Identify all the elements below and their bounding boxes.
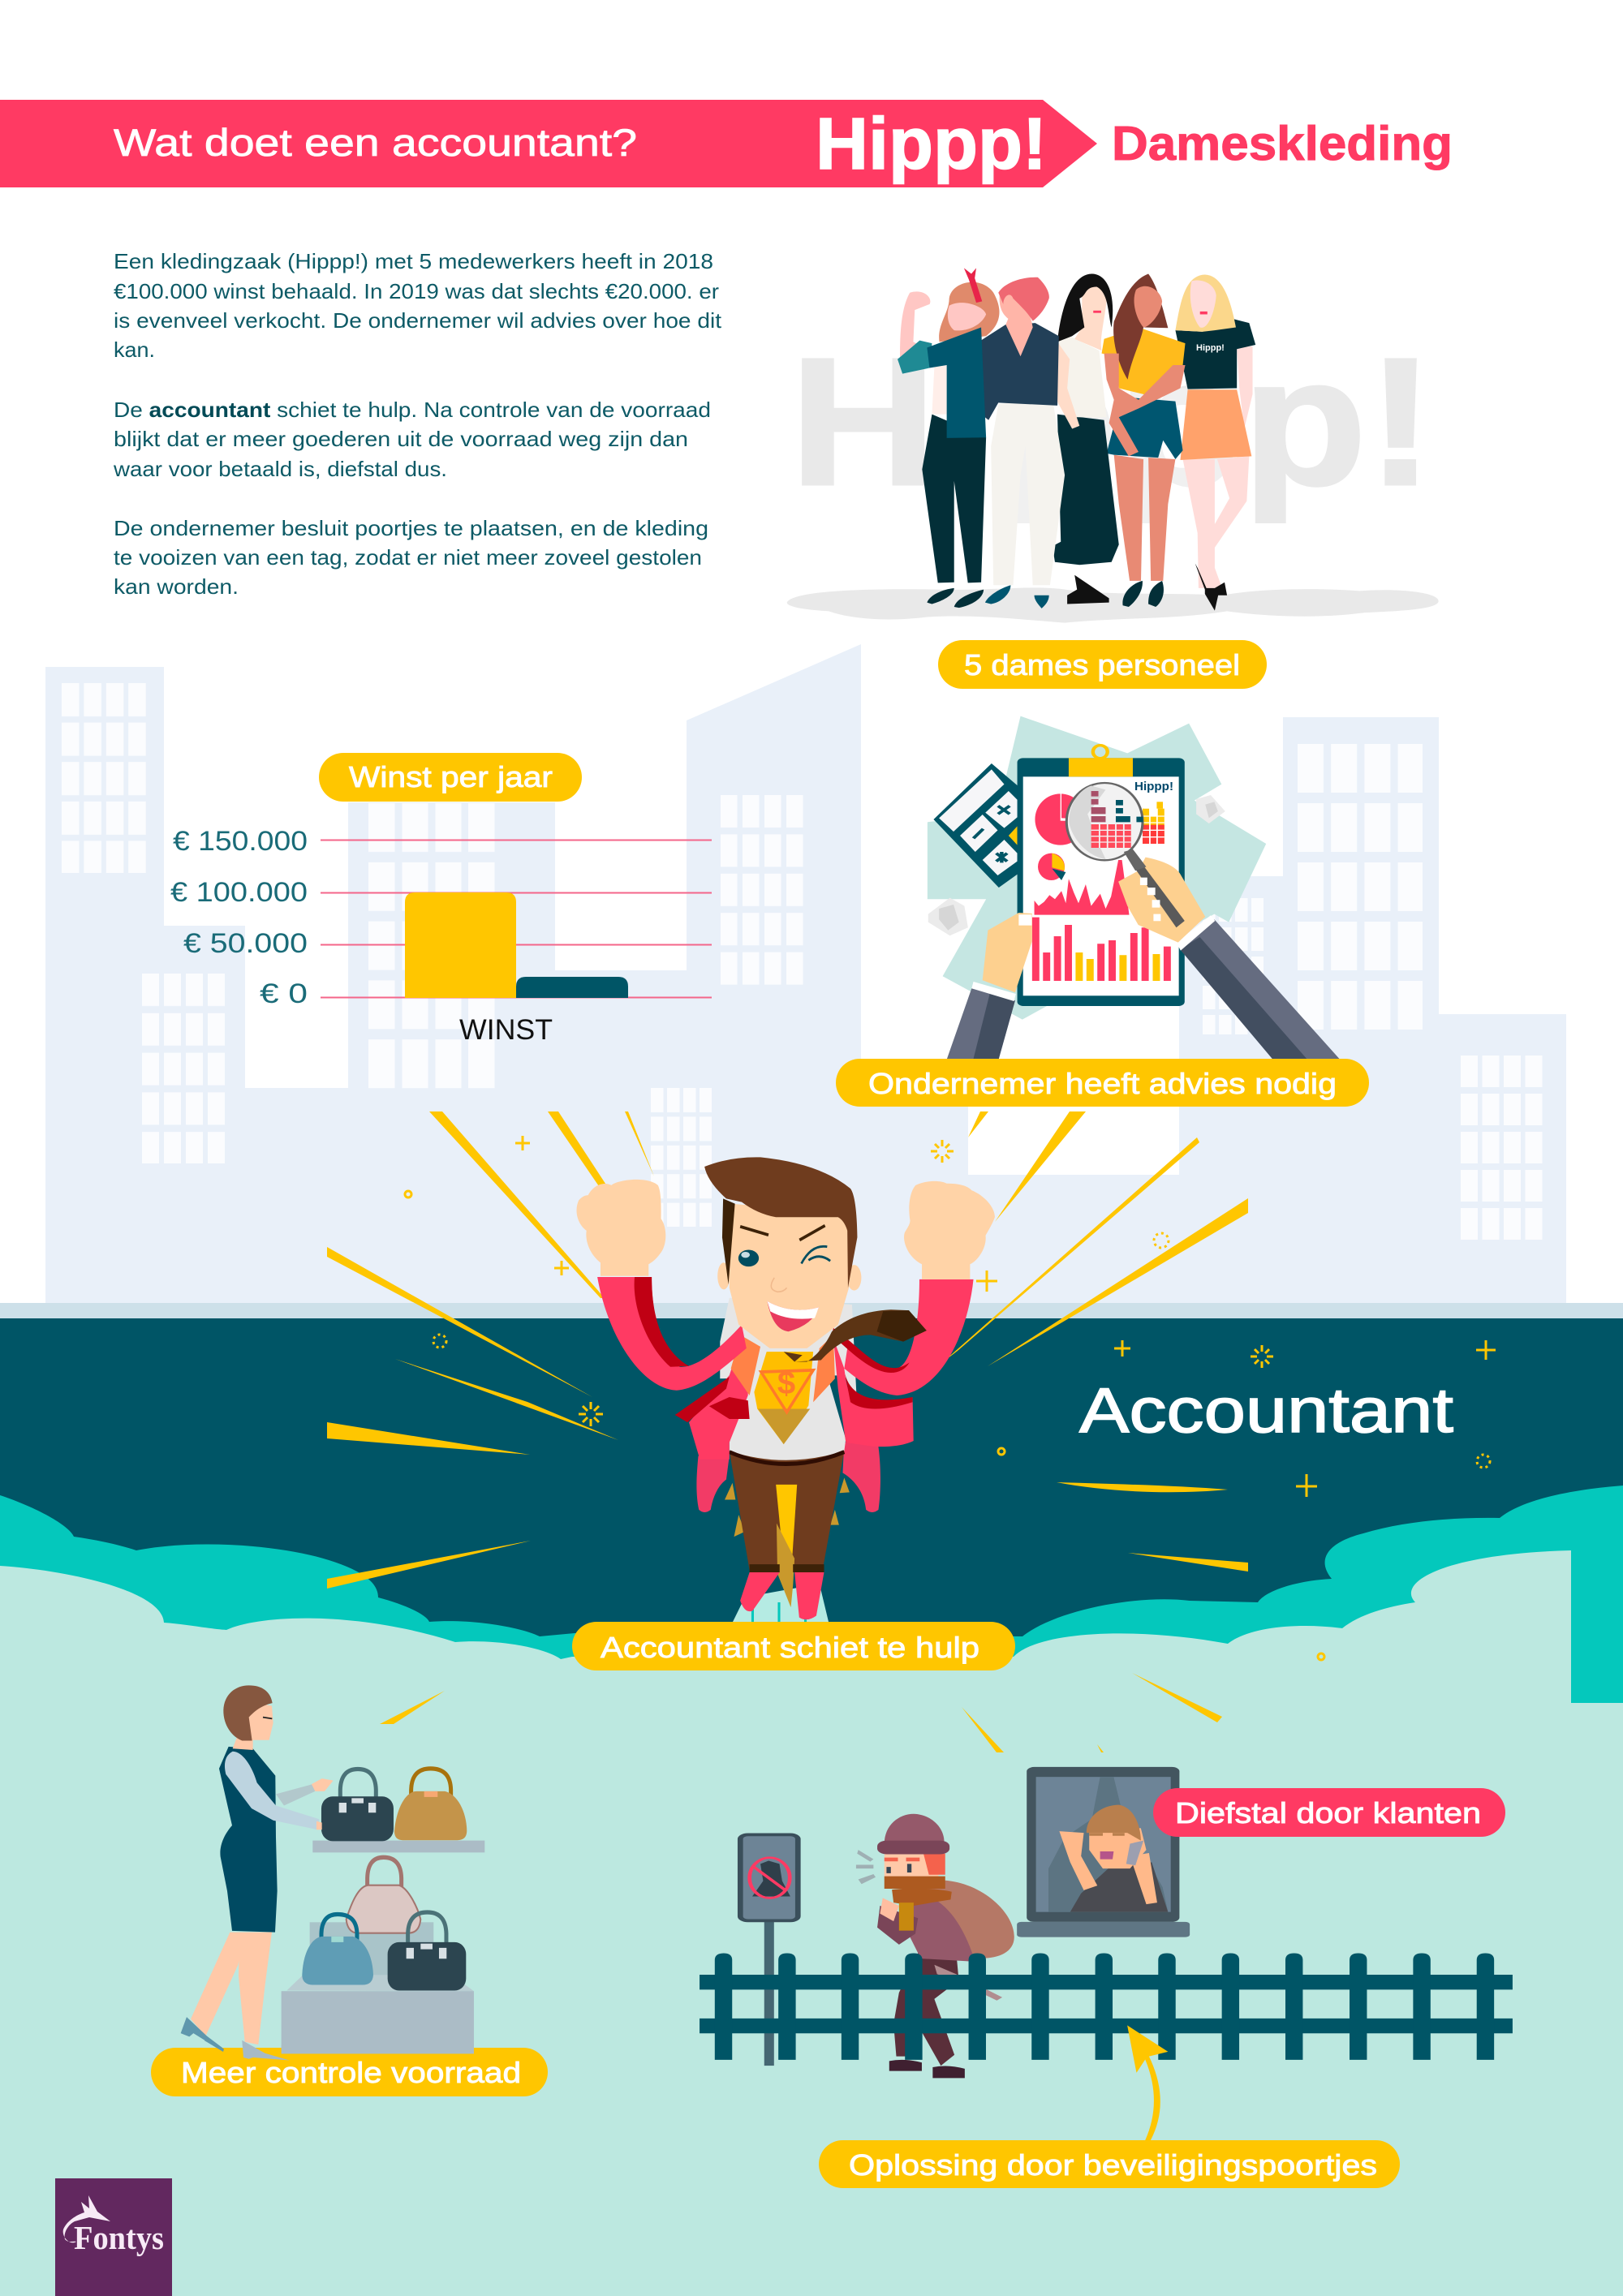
display stands [282, 1841, 484, 2053]
saleswoman [181, 1685, 334, 2061]
right arm [832, 1279, 974, 1395]
logo: fontys [55, 2178, 172, 2296]
intro text [113, 249, 722, 599]
shirt emblem: $ [777, 1365, 795, 1401]
woman 4 [1102, 273, 1186, 607]
pill: ondernemer: Ondernemer heeft advies nodig [868, 1067, 1337, 1100]
chart heading [319, 753, 582, 802]
bag: top left [321, 1769, 394, 1841]
pixel bar chart [1136, 801, 1165, 845]
bag: top right [394, 1769, 467, 1840]
intro text: De ondernemer besluit poortjes te plaatsen, en de kleding [114, 516, 708, 540]
thief [856, 1814, 1014, 2078]
shirt logo: Hippp! [1196, 343, 1225, 353]
head [704, 1157, 861, 1348]
intro text: kan worden. [114, 574, 239, 599]
pill: 5 dames personeel: 5 dames personeel [964, 648, 1240, 681]
pill: diefstal door klanten: Diefstal door klanten [1175, 1796, 1481, 1829]
trousers [730, 1451, 844, 1571]
teal cloud [0, 1486, 1623, 1866]
accountant heading: Accountant [1079, 1374, 1453, 1446]
bar 2018 [405, 892, 516, 998]
ground strip [0, 1303, 1623, 1319]
subtitle: Dameskleding [1112, 117, 1453, 170]
bar chart: winst per jaar [170, 753, 712, 1046]
shirt [730, 1348, 846, 1464]
window [1017, 1767, 1190, 1937]
redraw feet over pill [204, 2039, 474, 2061]
fence [700, 1954, 1513, 2060]
pill: oplossing: Oplossing door beveiligingspoortjes [849, 2148, 1377, 2182]
pill: meer controle voorraad: Meer controle voorraad [181, 2056, 521, 2089]
pill: oplossing [819, 2140, 1400, 2188]
axis labels: € 50.000 [183, 928, 308, 959]
pill: diefstal door klanten [1153, 1788, 1505, 1837]
no-thief sign [740, 1834, 798, 2066]
axis labels: € 150.000 [173, 826, 308, 857]
title: Wat doet een accountant? [114, 121, 637, 164]
intro text: €100.000 winst behaald. In 2019 was dat slechts €20.000. er [114, 279, 719, 303]
illustration: thief and witness [700, 1767, 1513, 2140]
woman 2 [979, 277, 1065, 608]
area chart [1035, 860, 1129, 915]
light cloud panel [0, 1550, 1623, 2296]
hands [983, 849, 1205, 992]
pill: meer controle voorraad [151, 2048, 548, 2096]
illustration: woman checking handbags [181, 1685, 484, 2061]
pill: accountant schiet te hulp: Accountant schiet te hulp [601, 1631, 979, 1664]
pill: ondernemer [836, 1059, 1369, 1107]
intro text: kan. [114, 338, 155, 362]
axis labels: € 0 [260, 978, 308, 1009]
right arm [1177, 915, 1339, 1059]
brand logo text: Hippp! [816, 104, 1047, 185]
intro text: is evenveel verkocht. De ondernemer wil advies over hoe dit [114, 308, 722, 333]
dark teal panel [0, 1318, 1623, 1805]
bag: dark lower [388, 1912, 466, 1991]
magnifying glass [1066, 783, 1143, 860]
pill: 5 dames personeel [938, 640, 1267, 689]
woman 3 [1050, 273, 1119, 604]
bag: blue [302, 1914, 373, 1985]
intro text: Een kledingzaak (Hippp!) met 5 medewerkers heeft in 2018 [114, 249, 713, 273]
left arm [597, 1277, 747, 1391]
left arm [947, 982, 1016, 1059]
clipboard brand: Hippp! [1134, 780, 1173, 793]
axis labels [170, 826, 308, 1009]
speed lines [327, 1111, 1248, 1752]
x label: WINST [459, 1014, 553, 1046]
bar 2019 [516, 977, 628, 998]
illustration: superhero accountant [577, 1157, 995, 1623]
coat tails [696, 1443, 880, 1512]
tie [784, 1309, 927, 1362]
intro text: waar voor betaald is, diefstal dus. [113, 457, 447, 481]
logo: fontys: Fontys [74, 2219, 164, 2256]
woman 5 [1175, 275, 1255, 611]
flames [725, 1478, 850, 1537]
rocket trail [733, 1584, 829, 1623]
calculator [933, 763, 1022, 888]
arrow [1127, 2025, 1168, 2140]
bag: pink [347, 1857, 420, 1933]
intro text: De accountant schiet te hulp. Na controle van de voorraad [114, 398, 711, 422]
woman 1 [898, 268, 999, 608]
ghost brand text: Hippp! [790, 320, 1435, 523]
sparkles [405, 1136, 1496, 1660]
pie charts [1035, 793, 1086, 880]
cuffs and boots [740, 1564, 824, 1619]
title banner [0, 100, 1097, 187]
illustration: clipboard with charts [928, 716, 1339, 1059]
bar chart [1032, 918, 1171, 981]
intro text: te vooizen van een tag, zodat er niet meer zoveel gestolen [114, 545, 702, 570]
intro text: blijkt dat er meer goederen uit de voorraad weg zijn dan [114, 427, 688, 451]
clipboard [1018, 746, 1185, 1006]
pill: accountant schiet te hulp [572, 1622, 1015, 1670]
city skyline background [45, 644, 1566, 1304]
illustration: five women [787, 268, 1439, 623]
fists [577, 1180, 995, 1279]
coat [675, 1335, 914, 1460]
cape [720, 1298, 857, 1399]
axis labels: € 100.000 [170, 877, 308, 908]
chart heading: Winst per jaar [349, 760, 553, 793]
